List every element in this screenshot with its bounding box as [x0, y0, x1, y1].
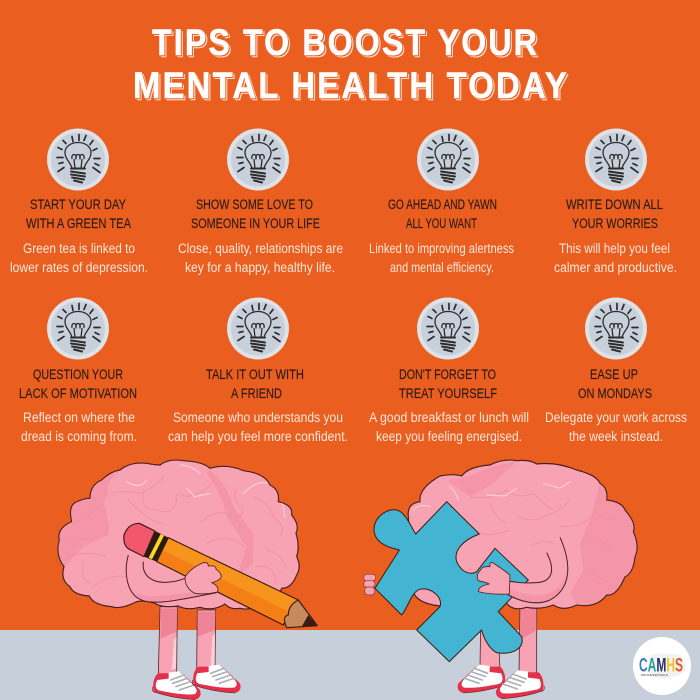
tip: motivation — [19, 298, 137, 444]
tip: friend: A FRIEND — [231, 386, 282, 401]
tip: mondays: ON MONDAYS — [578, 386, 652, 401]
tip: yawn — [369, 128, 514, 275]
tip: worries: YOUR WORRIES — [572, 216, 658, 231]
brain shading — [570, 484, 636, 605]
tip: yawn: and mental efficiency. — [390, 260, 494, 275]
tip: treat yourself: DON'T FORGET TO — [399, 367, 496, 382]
tip: treat yourself: keep you feeling energised. — [376, 429, 522, 444]
brain body — [408, 460, 637, 609]
pencil — [124, 523, 317, 628]
tip: yawn: Linked to improving alertness — [369, 241, 514, 256]
brain folds — [67, 477, 287, 587]
icon: light bulb — [585, 128, 647, 190]
brain highlights — [413, 482, 570, 510]
icon: light bulb — [227, 128, 289, 190]
title: TIPS TO BOOST YOUR — [152, 21, 539, 63]
tip: friend: can help you feel more confident. — [168, 429, 348, 444]
legs — [158, 607, 216, 675]
tip: show love: Close, quality, relationships are — [178, 241, 343, 256]
back fingers — [364, 574, 376, 595]
icon: light bulb — [585, 298, 647, 360]
logo: CAMHS: CAMHS — [639, 656, 683, 676]
icon: light bulb — [417, 128, 479, 190]
tip: mondays: the week instead. — [569, 429, 663, 444]
tip: friend — [168, 298, 348, 444]
shoe: right — [496, 670, 544, 699]
title: MENTAL HEALTH TODAY — [133, 64, 569, 106]
tip: treat yourself — [369, 298, 529, 444]
logo: CAMHS: PROFESSIONALS — [641, 673, 668, 677]
tip: worries: This will help you feel — [559, 241, 670, 256]
illustration: brain holding pencil — [58, 460, 317, 700]
tip: green tea: lower rates of depression. — [10, 260, 148, 275]
tip: show love: SOMEONE IN YOUR LIFE — [191, 216, 320, 231]
tip: mondays: EASE UP — [590, 367, 638, 382]
tip: treat yourself: TREAT YOURSELF — [399, 386, 497, 401]
icon: light bulb — [227, 298, 289, 360]
hand — [477, 562, 510, 594]
tip: green tea: Green tea is linked to — [23, 241, 135, 256]
tip: worries: calmer and productive. — [554, 260, 677, 275]
tip: treat yourself: A good breakfast or lunch will — [369, 410, 529, 425]
tip: friend: TALK IT OUT WITH — [206, 367, 304, 382]
tip: show love: SHOW SOME LOVE TO — [196, 197, 313, 212]
tip: yawn: GO AHEAD AND YAWN — [388, 197, 497, 212]
brain body — [58, 460, 299, 609]
tip: green tea — [10, 128, 148, 275]
shoe: left — [152, 671, 201, 700]
tip: show love: key for a happy, healthy life. — [185, 260, 335, 275]
puzzle piece — [374, 502, 528, 662]
shoe: right — [192, 665, 241, 693]
tip: motivation: dread is coming from. — [21, 429, 137, 444]
hand — [185, 562, 221, 594]
arm — [505, 537, 568, 603]
brain highlights — [127, 465, 285, 517]
icon: light bulb — [47, 128, 109, 190]
tip: motivation: Reflect on where the — [23, 410, 135, 425]
icon: light bulb — [47, 298, 109, 360]
tip: motivation: QUESTION YOUR — [33, 367, 123, 382]
icon: light bulb — [417, 298, 479, 360]
tip: worries — [554, 128, 677, 275]
arm — [126, 555, 217, 602]
brain shading — [59, 471, 120, 567]
ground band — [0, 630, 700, 700]
tip: yawn: ALL YOU WANT — [406, 216, 477, 231]
tip: motivation: LACK OF MOTIVATION — [19, 386, 137, 401]
brain folds — [470, 490, 617, 590]
tip: mondays — [545, 298, 687, 444]
tip: friend: Someone who understands you — [173, 410, 343, 425]
tip: worries: WRITE DOWN ALL — [566, 197, 663, 212]
illustration: brain holding puzzle piece — [364, 460, 637, 699]
tip: green tea: WITH A GREEN TEA — [26, 216, 131, 231]
title — [133, 21, 569, 106]
logo: CAMHS — [633, 637, 691, 695]
legs — [480, 607, 537, 675]
shoe: left — [458, 665, 506, 693]
tip: show love — [178, 128, 343, 275]
tip: green tea: START YOUR DAY — [30, 197, 126, 212]
